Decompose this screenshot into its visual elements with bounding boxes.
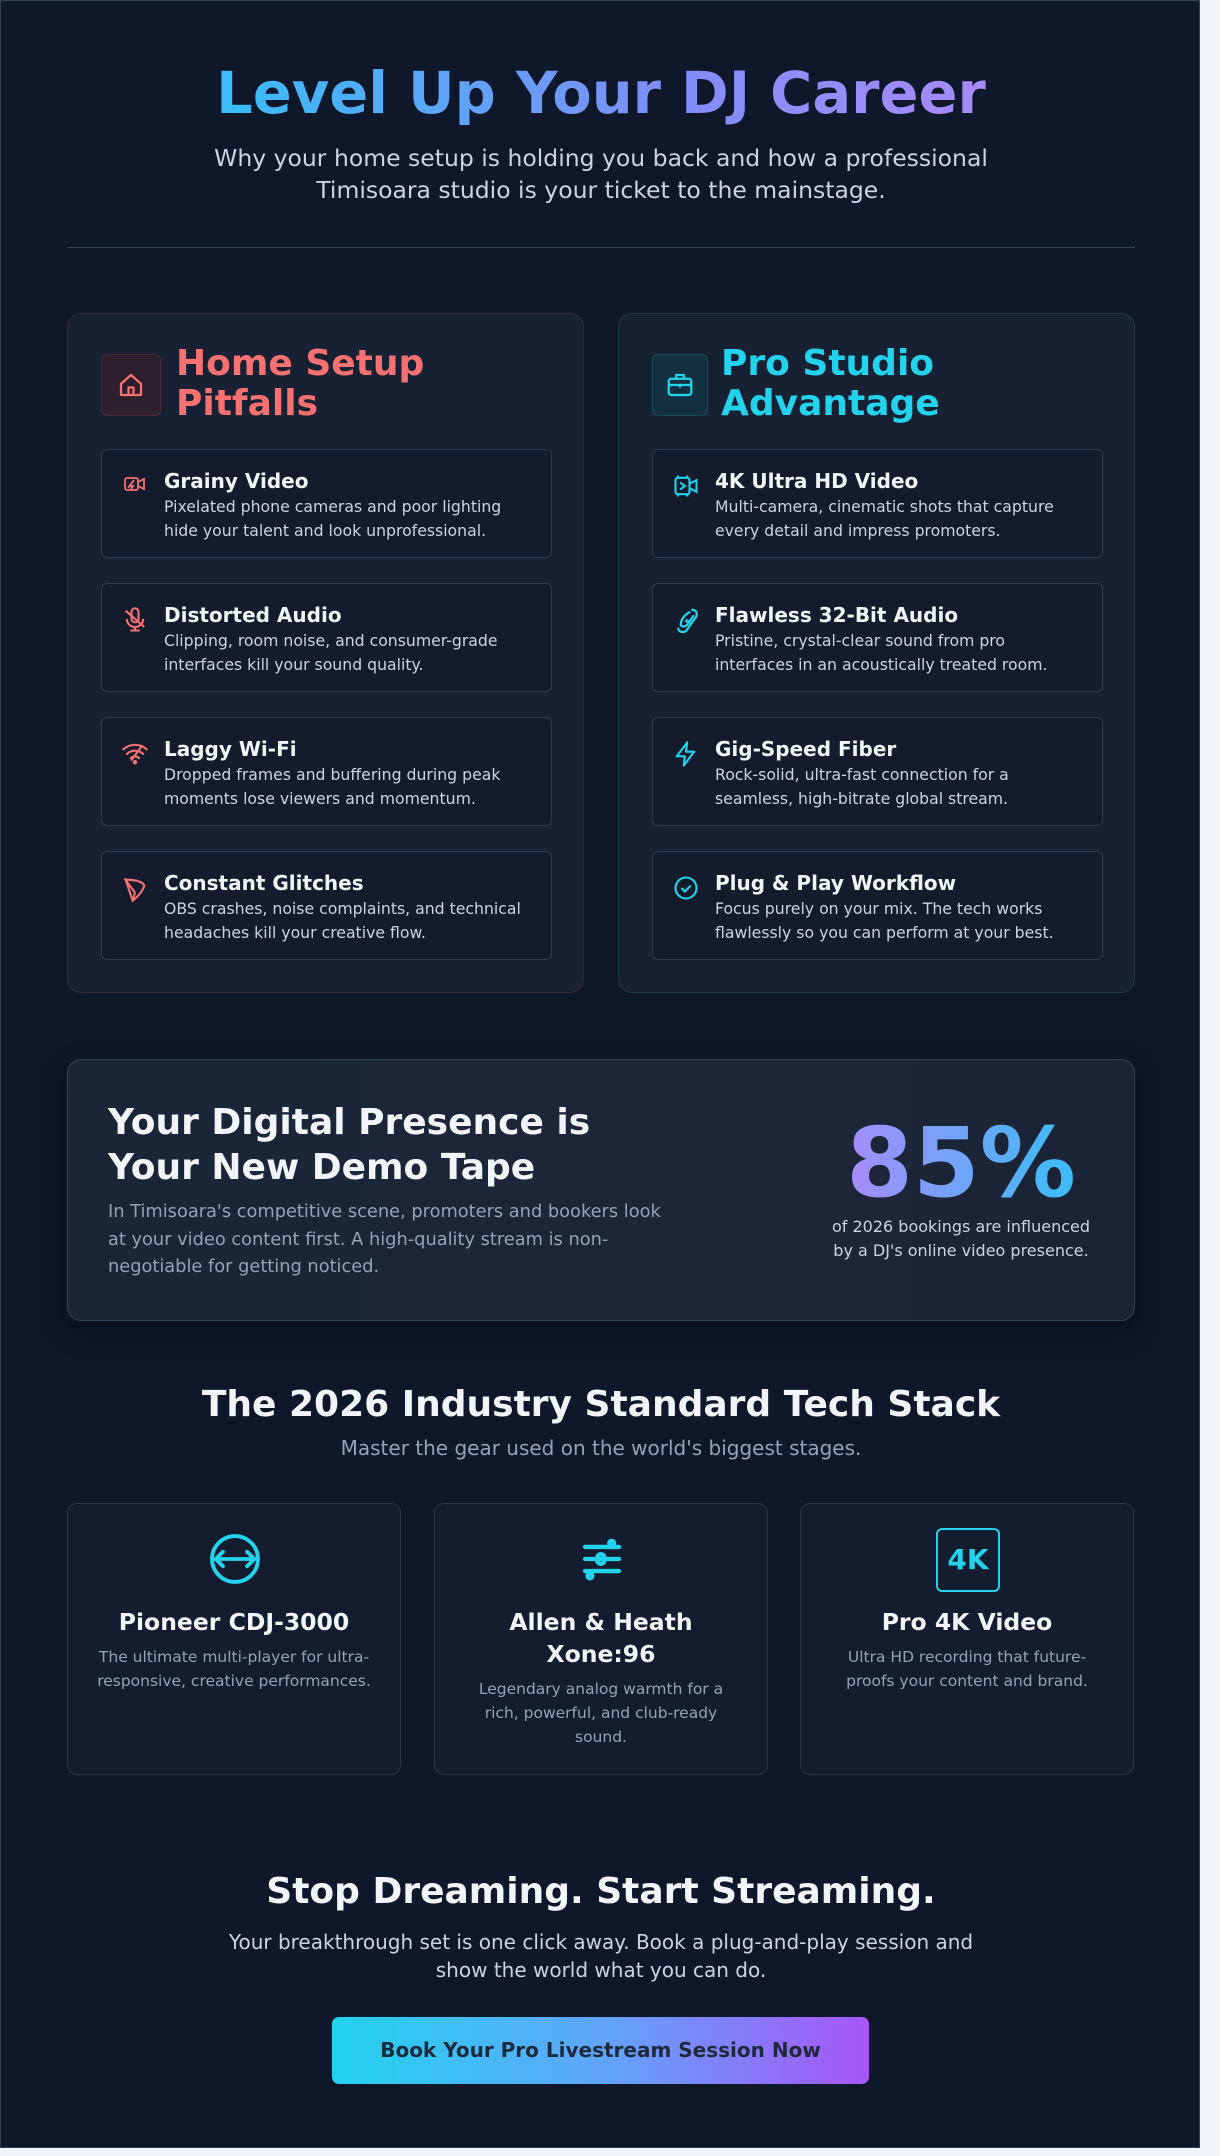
item: plug and play: Focus purely on your mix. The tech works flawlessly so you can perform at your best. xyxy=(715,899,1054,942)
panel: pro studio advantage xyxy=(618,313,1135,993)
item: distorted audio: Clipping, room noise, and consumer-grade interfaces kill your sound quality. xyxy=(164,631,498,674)
item: distorted audio xyxy=(101,583,552,692)
button: book session: Book Your Pro Livestream Session Now xyxy=(380,2038,821,2062)
card: allen & heath xyxy=(434,1503,768,1775)
item: plug and play: Plug & Play Workflow xyxy=(715,871,956,895)
text: description: In Timisoara's competitive scene, promoters and bookers look at your video content first. A high-quality stream is non-negotiable for getting noticed. xyxy=(108,1201,661,1277)
item: constant glitches xyxy=(101,851,552,960)
item: distorted audio: Distorted Audio xyxy=(164,603,342,627)
card: allen & heath: Legendary analog warmth for a rich, powerful, and club-ready sound. xyxy=(479,1680,723,1746)
icon: briefcase xyxy=(652,354,708,416)
subtitle: Timisoara studio is your ticket to the mainstage. xyxy=(316,176,886,204)
item: fiber: Gig-Speed Fiber xyxy=(715,737,896,761)
item: 4k video: 4K Ultra HD Video xyxy=(715,469,918,493)
item: 4k video: Multi-camera, cinematic shots that capture every detail and impress promoters. xyxy=(715,497,1054,540)
subtitle: Why your home setup is holding you back and how a professional xyxy=(214,144,988,172)
item: laggy wifi: Dropped frames and buffering during peak moments lose viewers and momentum. xyxy=(164,765,500,808)
stat: 85%: by a DJ's online video presence. xyxy=(833,1240,1089,1260)
stat: 85%: of 2026 bookings are influenced xyxy=(832,1217,1090,1236)
card: pro 4k video xyxy=(800,1503,1134,1775)
text: cta: show the world what you can do. xyxy=(436,1958,766,1982)
icon: 4K badge: 4K xyxy=(947,1543,989,1576)
card: pro 4k video: Pro 4K Video xyxy=(882,1608,1052,1636)
text: cta xyxy=(228,1930,973,1982)
stat: 85% xyxy=(832,1107,1090,1260)
heading: advantage: Advantage xyxy=(721,383,940,424)
item: grainy video xyxy=(101,449,552,558)
item: plug and play xyxy=(652,851,1103,960)
subheading: tech stack: Master the gear used on the world's biggest stages. xyxy=(341,1436,861,1460)
heading: pitfalls xyxy=(176,343,424,424)
text: cta: Your breakthrough set is one click away. Book a plug-and-play session and xyxy=(229,1930,973,1954)
heading: pitfalls: Home Setup xyxy=(176,343,424,384)
icon: mixer xyxy=(582,1538,622,1580)
item: 4k video xyxy=(652,449,1103,558)
button: book session xyxy=(332,2017,869,2084)
item: fiber: Rock-solid, ultra-fast connection for a seamless, high-bitrate global stream. xyxy=(715,765,1009,808)
item: grainy video: Grainy Video xyxy=(164,469,308,493)
card: pioneer cdj: The ultimate multi-player for ultra-responsive, creative performances. xyxy=(97,1648,371,1690)
item: 32-bit audio: Flawless 32-Bit Audio xyxy=(715,603,958,627)
item: 32-bit audio xyxy=(652,583,1103,692)
subtitle xyxy=(214,144,988,204)
item: constant glitches: Constant Glitches xyxy=(164,871,364,895)
stat: 85%: 85% xyxy=(846,1107,1076,1219)
heading: advantage xyxy=(721,343,940,424)
card: pioneer cdj: Pioneer CDJ-3000 xyxy=(119,1608,349,1636)
card: pro 4k video: Ultra HD recording that future-proofs your content and brand. xyxy=(846,1648,1088,1690)
icon: house xyxy=(101,354,161,416)
item: constant glitches: OBS crashes, noise complaints, and technical headaches kill your creative flow. xyxy=(164,899,521,942)
heading: demo tape: Your Digital Presence is xyxy=(108,1102,590,1143)
card: pioneer cdj xyxy=(67,1503,401,1775)
heading: cta: Stop Dreaming. Start Streaming. xyxy=(266,1871,936,1912)
card: allen & heath: Allen & Heath xyxy=(509,1608,693,1636)
heading: demo tape: Your New Demo Tape xyxy=(108,1147,535,1188)
heading: demo tape xyxy=(108,1102,590,1188)
card: allen & heath: Xone:96 xyxy=(546,1640,656,1668)
icon: cdj xyxy=(210,1534,260,1584)
item: laggy wifi xyxy=(101,717,552,826)
panel: digital presence stat xyxy=(67,1059,1135,1321)
title: Level Up Your DJ Career xyxy=(216,60,986,127)
item: grainy video: Pixelated phone cameras and poor lighting hide your talent and look unprofessional. xyxy=(164,497,501,540)
icon: 4K badge xyxy=(936,1528,1000,1592)
item: 32-bit audio: Pristine, crystal-clear sound from pro interfaces in an acoustically treated room. xyxy=(715,631,1047,674)
item: laggy wifi: Laggy Wi-Fi xyxy=(164,737,297,761)
heading: pitfalls: Pitfalls xyxy=(176,383,318,424)
heading: advantage: Pro Studio xyxy=(721,343,934,384)
item: fiber xyxy=(652,717,1103,826)
panel: home setup pitfalls xyxy=(67,313,584,993)
heading: tech stack: The 2026 Industry Standard Tech Stack xyxy=(202,1384,1000,1425)
